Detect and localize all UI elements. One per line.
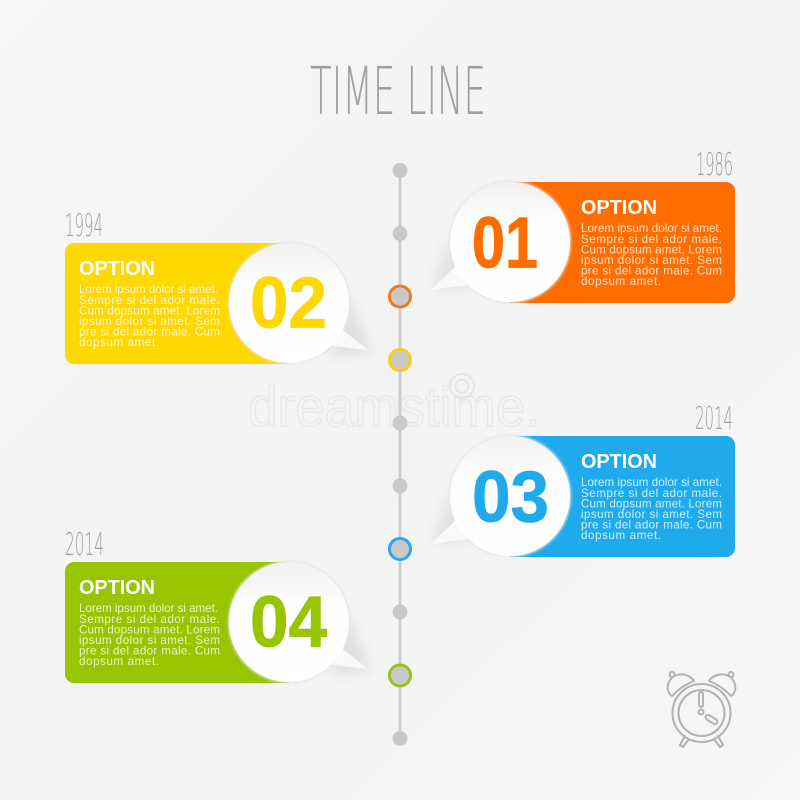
panel: option 03 xyxy=(431,401,735,557)
text 01: ipsum dolor si amet. Sem xyxy=(581,254,722,267)
timeline axis xyxy=(390,163,410,746)
text 04: Lorem ipsum dolor si amet. xyxy=(79,602,218,615)
panel: option 02 xyxy=(65,208,372,364)
text 01: dopsum amet. xyxy=(581,275,661,288)
text 03 xyxy=(581,451,722,542)
marker: green xyxy=(390,665,410,686)
panel: option 04 xyxy=(65,527,372,683)
text 02: Lorem ipsum dolor si amet. xyxy=(79,283,218,296)
panel: option 02: 1994 xyxy=(65,208,103,244)
text 02: Sempre si del ador male. xyxy=(79,294,220,307)
bubble shadow xyxy=(432,490,470,544)
text 02: Cum dopsum amet. Lorem xyxy=(79,304,220,318)
text 01 xyxy=(581,197,722,288)
text 02: pre si del ador male. Cum xyxy=(79,326,220,338)
text 04: ipsum dolor si amet. Sem xyxy=(79,634,220,647)
panel: option 03: 2014 xyxy=(695,401,733,437)
bubble 04: 04 xyxy=(250,582,327,662)
bubble 02: 02 xyxy=(250,264,327,344)
card 02 xyxy=(65,243,289,364)
text 04 xyxy=(79,577,220,668)
bubble 04 xyxy=(228,561,368,683)
bubble 01: 01 xyxy=(472,204,538,284)
card 03 xyxy=(510,436,735,557)
bubble shadow xyxy=(330,609,372,675)
text 02 xyxy=(79,258,220,349)
watermark: dreamstime. xyxy=(248,375,540,438)
text 04: Cum dopsum amet. Lorem xyxy=(79,624,220,636)
text 03: Cum dopsum amet. Lorem xyxy=(581,498,722,510)
text 01: OPTION xyxy=(581,197,657,219)
bubble 01 xyxy=(431,181,571,303)
text 01: pre si del ador male. Cum xyxy=(581,264,722,278)
text 04: OPTION xyxy=(79,577,155,599)
bubble 02 xyxy=(228,242,368,364)
bubble shadow xyxy=(432,236,470,290)
card 01 xyxy=(510,182,735,303)
text 03: dopsum amet. xyxy=(581,529,661,542)
marker: blue xyxy=(390,538,410,560)
text 03: Lorem ipsum dolor si amet. xyxy=(581,476,722,489)
text 02: OPTION xyxy=(79,258,155,280)
text 01: Cum dopsum amet. Lorem xyxy=(581,244,722,256)
text: 1986 xyxy=(696,147,733,183)
marker: yellow xyxy=(390,350,410,370)
text 04: dopsum amet. xyxy=(79,655,159,668)
icon: alarm clock xyxy=(668,672,735,747)
panel: option 01 xyxy=(431,147,735,303)
bubble 03 xyxy=(431,435,571,557)
bubble shadow xyxy=(330,290,372,356)
title: TIME LINE xyxy=(310,53,486,130)
panel: option 04: 2014 xyxy=(65,527,104,563)
text 04: Sempre si del ador male. xyxy=(79,613,220,626)
text 01: Lorem ipsum dolor si amet. xyxy=(581,222,722,235)
text 03: OPTION xyxy=(581,451,657,473)
text 03: pre si del ador male. Cum xyxy=(581,518,722,532)
marker: orange xyxy=(390,286,410,307)
card 04 xyxy=(65,562,289,683)
text 04: pre si del ador male. Cum xyxy=(79,644,220,658)
text 03: Sempre si del ador male. xyxy=(581,487,722,500)
text 02: dopsum amet. xyxy=(79,336,159,349)
text 03: ipsum dolor si amet. Sem xyxy=(581,508,722,521)
text 02: ipsum dolor si amet. Sem xyxy=(79,315,220,328)
bubble 03: 03 xyxy=(472,458,549,538)
text 01: Sempre si del ador male. xyxy=(581,233,722,246)
